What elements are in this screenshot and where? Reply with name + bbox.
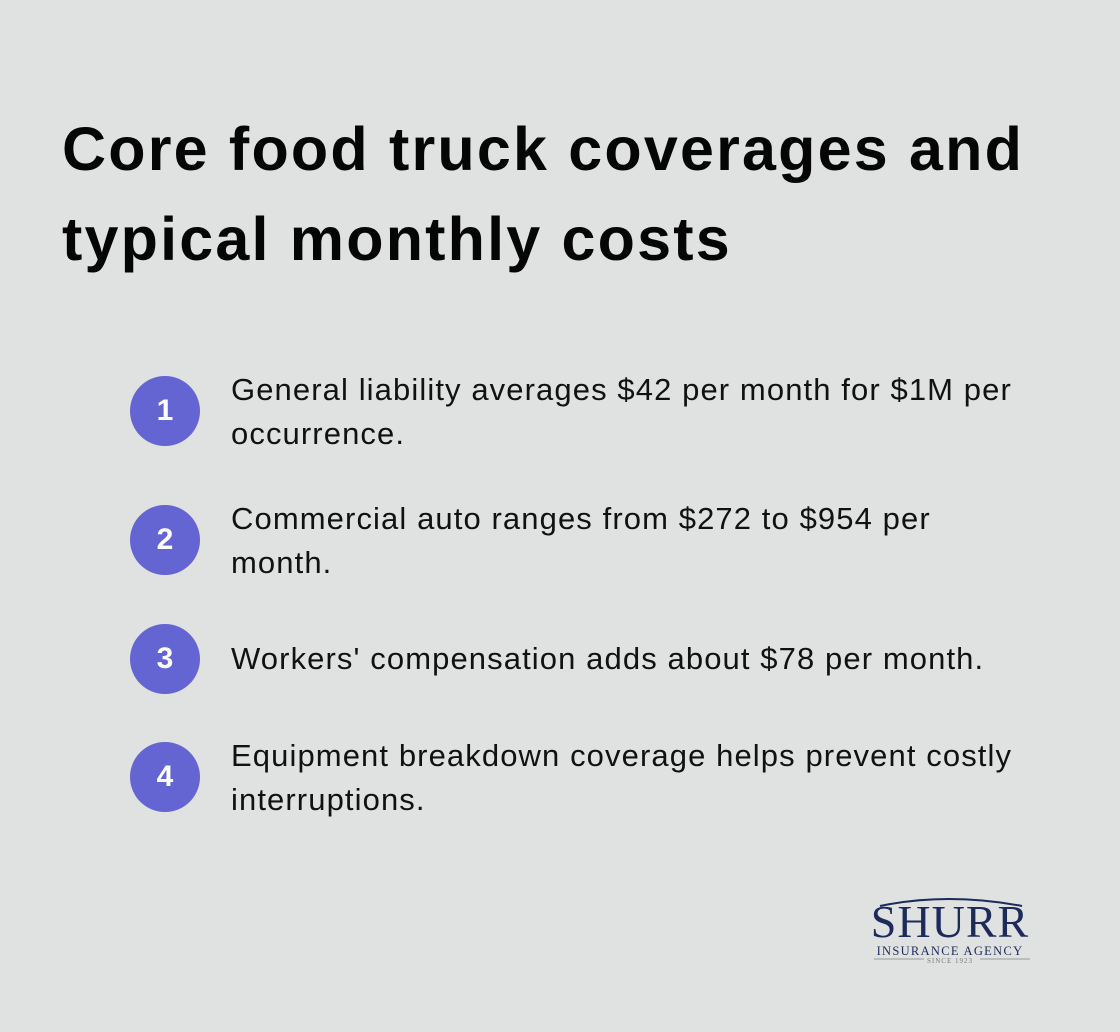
- icon: number 1: [130, 376, 200, 446]
- item 2: month.: [231, 545, 332, 580]
- item 3: Workers' compensation adds about $78 per month.: [231, 641, 984, 676]
- title: Core food truck coverages and: [62, 115, 1024, 183]
- icon: number 3: 3: [157, 642, 173, 675]
- item 4: interruptions.: [231, 782, 426, 817]
- title: typical monthly costs: [62, 205, 732, 273]
- item 4: [130, 738, 1012, 817]
- item 2: Commercial auto ranges from $272 to $954 per: [231, 501, 931, 536]
- icon: number 4: 4: [157, 760, 173, 793]
- logo: INSURANCE AGENCY: [877, 944, 1023, 958]
- icon: number 2: 2: [157, 523, 173, 556]
- icon: number 2: [130, 505, 200, 575]
- item 3: [130, 624, 984, 694]
- item 2: [130, 501, 931, 580]
- icon: number 4: [130, 742, 200, 812]
- item 1: [130, 372, 1012, 451]
- icon: number 1: 1: [157, 394, 173, 427]
- item 1: occurrence.: [231, 416, 405, 451]
- logo: SINCE 1923: [927, 957, 973, 965]
- item 1: General liability averages $42 per month for $1M per: [231, 372, 1012, 407]
- item 4: Equipment breakdown coverage helps prevent costly: [231, 738, 1012, 773]
- icon: number 3: [130, 624, 200, 694]
- title: [62, 115, 1024, 273]
- logo: SHURR: [871, 896, 1029, 947]
